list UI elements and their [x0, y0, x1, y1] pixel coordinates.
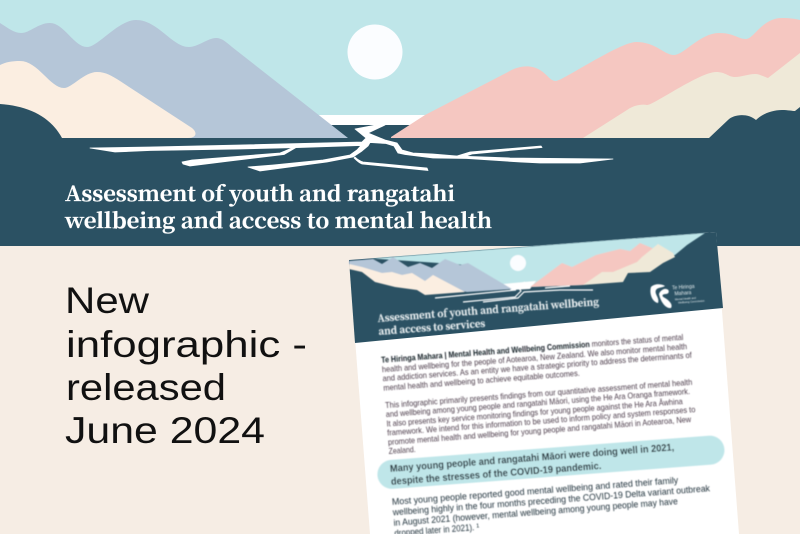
- title: [64, 177, 492, 234]
- page header river: [435, 282, 593, 302]
- title: wellbeing and access to mental health: [64, 204, 492, 234]
- second paragraph: It also presents key service monitoring findings for young people against the He Ara Āwhina: [386, 396, 683, 429]
- logo wordmark: Te Hiringa: [672, 284, 695, 292]
- page header sky: [372, 233, 705, 289]
- third paragraph: [391, 473, 712, 534]
- document preview: [349, 232, 739, 534]
- mountains: blue range: [0, 20, 348, 138]
- sky: [0, 0, 800, 125]
- logo wordmark: Mental Health and: [675, 296, 697, 301]
- second paragraph: This infographic primarily presents findings from our quantitative assessment of mental health: [385, 378, 693, 410]
- mountains: cream range: [583, 53, 800, 138]
- page header cream range: [583, 244, 675, 285]
- intro paragraph: [381, 332, 693, 393]
- callout pill: Many young people and rangatahi Māori were doing well in 2021,: [390, 441, 675, 475]
- page header sun: [510, 255, 526, 271]
- page header peach range: [349, 264, 465, 295]
- logo wordmark: [672, 283, 705, 305]
- callout pill: despite the stresses of the COVID-19 pandemic.: [391, 460, 602, 488]
- dark hill left: [0, 104, 62, 138]
- panel: landscape banner: [0, 0, 800, 246]
- logo wordmark: Mahara: [674, 290, 692, 297]
- third paragraph: in August 2021 (however, mental wellbeing among young people may have: [393, 496, 678, 529]
- second paragraph: and wellbeing among young people and rangatahi Māori, using the He Ara Oranga framework.: [386, 387, 690, 419]
- page header water: [503, 281, 536, 290]
- horizon water: [310, 115, 440, 125]
- page text: [365, 283, 729, 534]
- heading: new infographic: released: [66, 367, 226, 408]
- page header pink range: [530, 243, 660, 287]
- dark hill right: [709, 107, 800, 150]
- second paragraph: Zealand.: [388, 445, 416, 456]
- mountains: pink range: [391, 18, 800, 138]
- intro paragraph: Te Hiringa Mahara | Mental Health and Wellbeing Commission monitors the status of mental: [381, 333, 684, 365]
- page header title: [377, 293, 600, 338]
- intro paragraph: and addiction services. As an entity we have a strategic priority to address the determinants of: [382, 351, 693, 383]
- heading: new infographic: June 2024: [65, 410, 265, 451]
- sun: [348, 24, 402, 80]
- page header title: Assessment of youth and rangatahi wellbeing: [377, 293, 599, 325]
- second paragraph: framework. We intend for this information to be used to inform policy and system responses to: [387, 405, 696, 438]
- heading: new infographic: infographic -: [66, 324, 307, 365]
- third paragraph: Most young people reported good mental wellbeing and rated their family: [392, 475, 679, 508]
- heading: new infographic: New: [65, 280, 149, 321]
- page header: [349, 232, 723, 343]
- intro paragraph: health and wellbeing for the people of Aotearoa, New Zealand. We also monitor mental health: [382, 342, 688, 374]
- river: [90, 125, 613, 171]
- page header blue range: [349, 257, 512, 292]
- mountains: peach range: [0, 61, 195, 138]
- second paragraph: promote mental health and wellbeing for young people and rangatahi Māori in Aotearoa, New: [388, 415, 691, 447]
- callout pill: [376, 435, 726, 490]
- second paragraph: [385, 378, 697, 456]
- heading: new infographic: [65, 280, 307, 451]
- page logo: [650, 284, 672, 308]
- page header title: and access to services: [378, 315, 486, 338]
- title: Assessment of youth and rangatahi: [65, 177, 455, 207]
- third paragraph: wellbeing highly in the four months preceding the COVID-19 Delta variant outbreak: [391, 483, 710, 518]
- intro paragraph: mental health and wellbeing to achieve equitable outcomes.: [383, 369, 580, 393]
- logo wordmark: Wellbeing Commission: [678, 299, 705, 305]
- page: [349, 232, 739, 534]
